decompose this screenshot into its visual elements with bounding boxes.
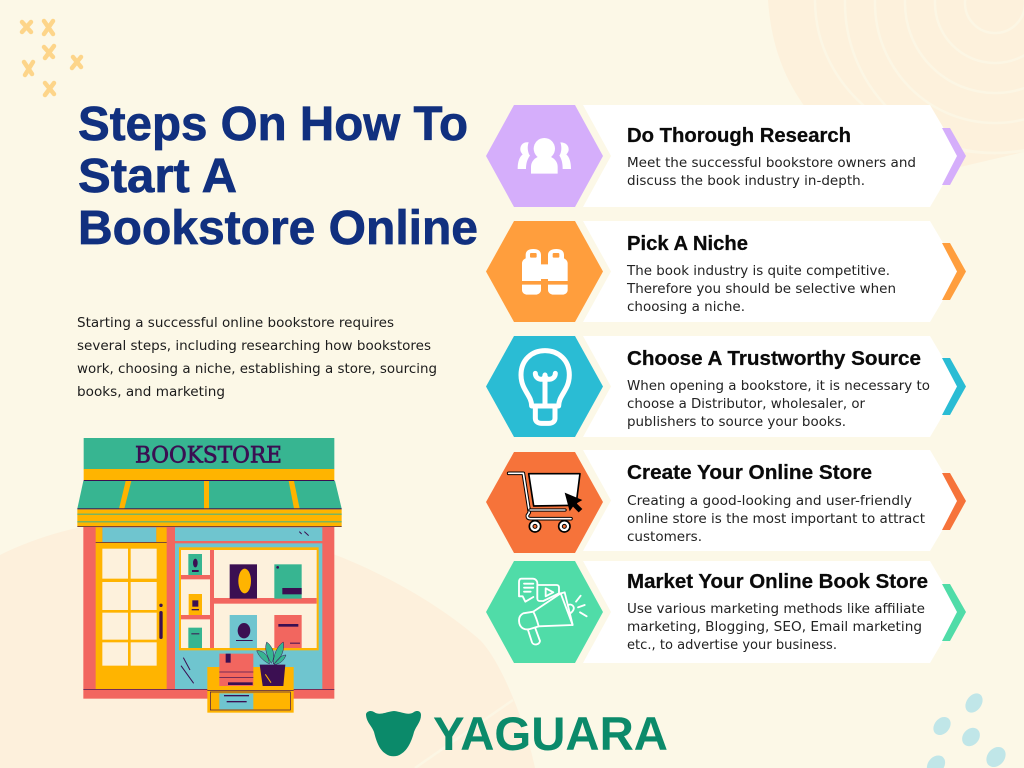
description: marketing, Blogging, SEO, Email marketing — [627, 620, 922, 635]
icon: megaphone — [519, 579, 587, 644]
card — [583, 221, 960, 322]
description — [627, 494, 925, 545]
card — [583, 450, 960, 551]
description: publishers to source your books. — [627, 415, 846, 430]
crate with books and plant — [207, 642, 294, 713]
title: Start A — [78, 150, 237, 203]
description — [627, 156, 916, 189]
shop window — [175, 527, 322, 689]
description: discuss the book industry in-depth. — [627, 174, 865, 189]
icon: binoculars — [522, 249, 568, 295]
door — [96, 527, 167, 689]
description: Therefore you should be selective when — [626, 282, 896, 297]
description — [626, 264, 896, 315]
hexagon — [486, 221, 603, 322]
title: Bookstore Online — [78, 202, 478, 255]
icon: shopping cart — [509, 473, 582, 532]
illustration: bookstore — [77, 438, 342, 713]
icon: light bulb — [521, 351, 569, 423]
heading: Market Your Online Book Store — [627, 571, 928, 593]
hexagon — [486, 561, 603, 663]
heading: Choose A Trustworthy Source — [627, 348, 921, 370]
chevron — [942, 473, 966, 530]
description: etc., to advertise your business. — [627, 638, 837, 653]
heading: Do Thorough Research — [627, 125, 851, 147]
step 4: online store — [486, 450, 966, 553]
icon: people — [518, 138, 571, 174]
step 2: niche — [486, 221, 966, 322]
wordmark: YAGUARA — [433, 708, 668, 761]
chevron — [942, 358, 966, 415]
step 1: research — [486, 105, 966, 207]
description: The book industry is quite competitive. — [626, 264, 890, 279]
shop sign — [84, 438, 334, 481]
background blob: bottom left — [0, 518, 535, 768]
description: Use various marketing methods like affiliate — [627, 602, 925, 617]
hexagon — [486, 452, 603, 553]
step 3: source — [486, 336, 966, 437]
description: choose a Distributor, wholesaler, or — [627, 397, 866, 412]
background blob: top right rings — [768, 0, 1024, 168]
decorative crosses — [22, 21, 81, 95]
heading: Create Your Online Store — [627, 462, 872, 484]
decorative ovals — [923, 690, 1010, 768]
logo: Yaguara — [366, 708, 668, 761]
icon: jaguar head — [366, 711, 421, 756]
awning — [77, 481, 342, 527]
description: When opening a bookstore, it is necessary to — [627, 379, 930, 394]
title: Steps On How To — [78, 98, 468, 151]
hexagon — [486, 105, 603, 207]
intro paragraph: work, choosing a niche, establishing a store, sourcing — [77, 362, 437, 377]
shop sign: BOOKSTORE — [135, 443, 282, 468]
intro paragraph: several steps, including researching how bookstores — [77, 339, 431, 354]
books on shelves — [188, 554, 302, 648]
description: customers. — [627, 530, 702, 545]
step 5: marketing — [486, 561, 966, 663]
hexagon — [486, 336, 603, 437]
title — [78, 98, 478, 255]
chevron — [942, 584, 966, 641]
chevron — [942, 243, 966, 300]
description — [627, 602, 925, 653]
description: Meet the successful bookstore owners and — [627, 156, 916, 171]
card — [583, 561, 960, 663]
intro paragraph: Starting a successful online bookstore requires — [77, 316, 394, 331]
intro paragraph: books, and marketing — [77, 385, 225, 400]
description — [627, 379, 930, 430]
card — [583, 105, 960, 207]
description: online store is the most important to attract — [627, 512, 925, 527]
chevron — [942, 128, 966, 185]
description: choosing a niche. — [627, 300, 745, 315]
heading: Pick A Niche — [627, 233, 748, 255]
card — [583, 336, 960, 437]
intro paragraph — [77, 316, 437, 400]
description: Creating a good-looking and user-friendly — [627, 494, 912, 509]
